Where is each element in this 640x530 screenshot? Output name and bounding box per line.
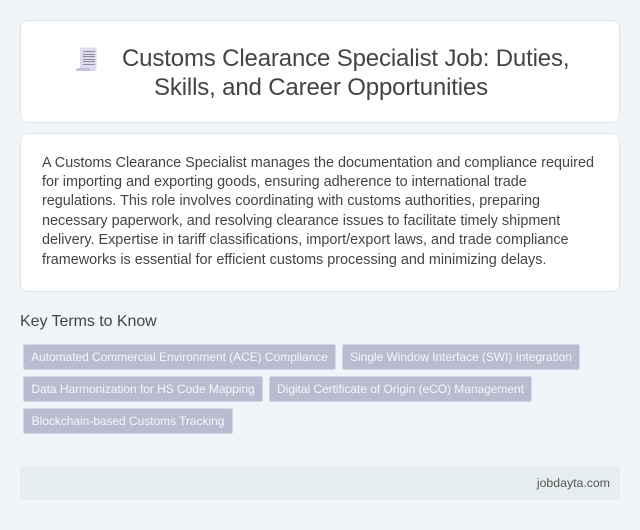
description text: delivery. Expertise in tariff classifications, import/export laws, and trade compliance	[42, 232, 569, 248]
title: Customs Clearance Specialist Job: Duties,	[122, 45, 569, 72]
tag: digital certificate	[269, 376, 532, 402]
description text: frameworks is essential for efficient customs processing and minimizing delays.	[42, 252, 546, 268]
tag: ACE compliance	[23, 344, 336, 370]
tag: blockchain tracking: Blockchain-based Customs Tracking	[32, 414, 224, 428]
title	[122, 45, 569, 101]
description text: for importing and exporting goods, ensuring adherence to international trade	[42, 174, 527, 190]
tag: data harmonization	[23, 376, 263, 402]
panel: title card	[20, 20, 620, 123]
icon: document scroll	[76, 48, 96, 71]
description text	[42, 154, 594, 268]
tag list	[23, 344, 580, 434]
tag: SWI integration	[342, 344, 580, 370]
description text: A Customs Clearance Specialist manages the documentation and compliance required	[42, 154, 594, 170]
title: Skills, and Career Opportunities	[154, 74, 488, 101]
tag: digital certificate: Digital Certificate of Origin (eCO) Management	[277, 382, 524, 396]
panel: description	[20, 133, 620, 292]
description text: regulations. This role involves coordinating with customs authorities, preparing	[42, 193, 540, 209]
footer source text: jobdayta.com	[537, 476, 610, 490]
footer bar	[20, 466, 620, 500]
description text: necessary paperwork, and resolving clearance issues to facilitate timely shipment	[42, 213, 560, 229]
heading: key terms: Key Terms to Know	[20, 313, 157, 330]
tag: SWI integration: Single Window Interface (SWI) Integration	[350, 350, 572, 364]
tag: blockchain tracking	[23, 408, 233, 434]
tag: ACE compliance: Automated Commercial Environment (ACE) Compliance	[31, 350, 328, 364]
tag: data harmonization: Data Harmonization for HS Code Mapping	[31, 382, 255, 396]
